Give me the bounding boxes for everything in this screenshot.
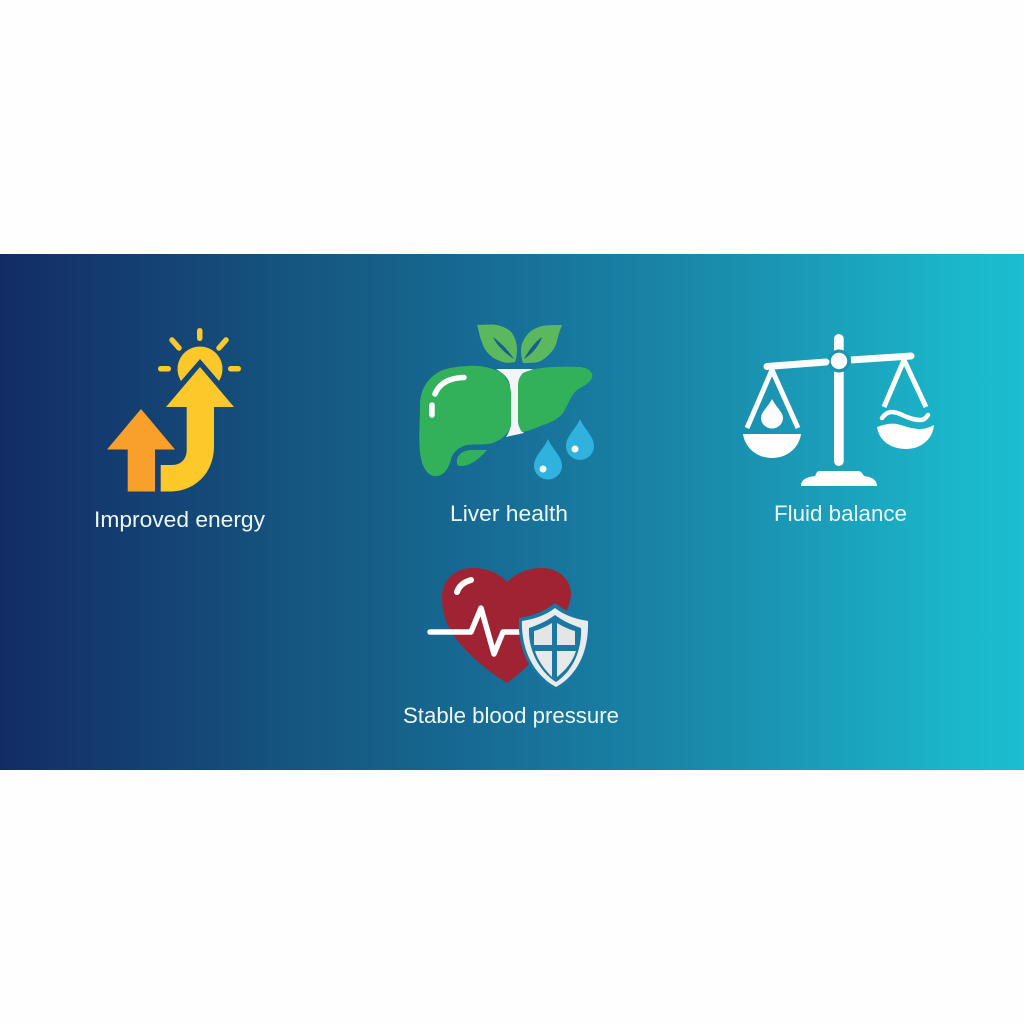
- icon: sun: [158, 328, 241, 381]
- icon: liver lower lobe: [457, 450, 487, 466]
- icon: heart highlight: [457, 580, 471, 592]
- icon: water drops: [534, 419, 594, 480]
- banner background: [0, 254, 1024, 770]
- icon: balance scale: [743, 334, 934, 486]
- icon: leaves: [477, 325, 562, 363]
- label: stable blood pressure: Stable blood pressure: [403, 703, 619, 728]
- label: improved energy: Improved energy: [94, 507, 265, 532]
- label: fluid balance: Fluid balance: [774, 501, 907, 526]
- panel: stable blood pressure: [403, 568, 619, 728]
- icon: orange arrow: [107, 409, 175, 492]
- panel: fluid balance: [743, 334, 934, 526]
- panel: liver health: [419, 325, 594, 526]
- icon: liver: [419, 366, 592, 476]
- icon: pulse line: [430, 608, 522, 654]
- icon: yellow curved arrow: [161, 367, 234, 492]
- panel: improved energy: [94, 328, 265, 532]
- icon: shield: [519, 603, 591, 690]
- icon: heart: [442, 568, 571, 683]
- label: liver health: Liver health: [450, 501, 568, 526]
